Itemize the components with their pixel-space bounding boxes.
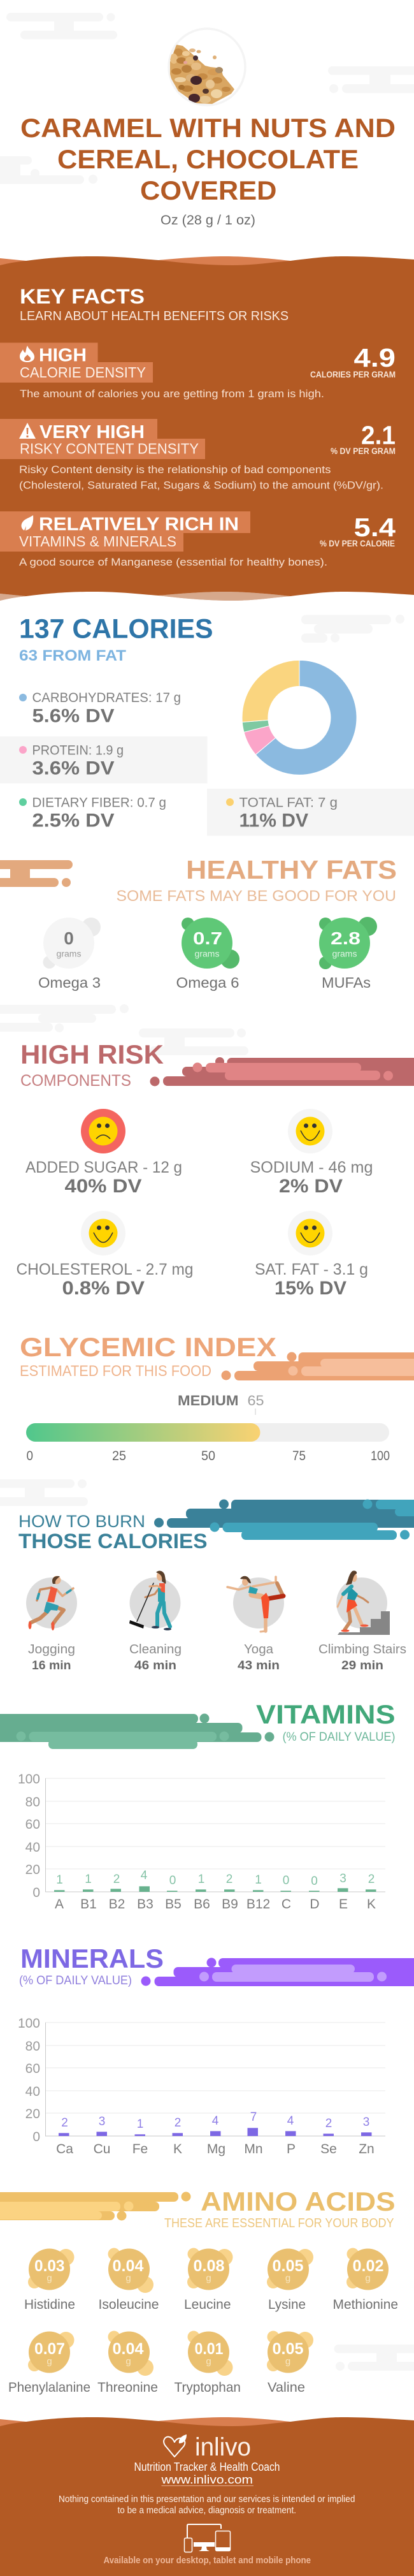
fact: calorie density: 4.9	[354, 343, 396, 372]
legend: carbohydrates: 5.6% DV	[32, 705, 115, 727]
fact: calorie density: CALORIE DENSITY	[20, 364, 146, 381]
burn heading: HOW TO BURN	[18, 1512, 145, 1531]
amino: leucine: g	[206, 2272, 211, 2284]
background cloud: title left	[0, 156, 97, 184]
amino: histidine: Histidine	[24, 2297, 75, 2312]
bar chart: vitamins: 1	[198, 1873, 204, 1886]
amino acids heading: THESE ARE ESSENTIAL FOR YOUR BODY	[164, 2216, 394, 2230]
legend: dietary fiber: DIETARY FIBER: 0.7 g	[32, 796, 166, 810]
stat: omega 3	[38, 918, 101, 991]
activity: yoga	[227, 1576, 284, 1672]
bar chart: minerals: Mg	[207, 2142, 225, 2156]
minerals heading	[19, 1943, 164, 1987]
amino: phenylalanine: Phenylalanine	[8, 2380, 90, 2395]
bar chart: minerals: 80	[25, 2039, 40, 2054]
glycemic heading	[20, 1332, 276, 1380]
background cloud: high risk	[139, 1028, 248, 1055]
decoration: vitamins bars	[0, 1714, 274, 1749]
bar chart: minerals: 2	[61, 2116, 68, 2130]
icon: warning triangle	[19, 423, 36, 439]
gauge bar	[26, 1423, 389, 1442]
logo: inlivo	[164, 2433, 251, 2461]
stat: omega 3: Omega 3	[38, 974, 101, 991]
activity: cleaning: Cleaning	[129, 1643, 182, 1657]
gauge label	[178, 1393, 264, 1415]
activity: jogging: 16 min	[32, 1659, 71, 1672]
fact: risky content density: RISKY CONTENT DENSITY	[20, 440, 199, 457]
bar chart: minerals: Se	[320, 2142, 337, 2156]
icon: sad face	[81, 1109, 125, 1153]
legend: protein	[0, 736, 208, 784]
amino: isoleucine	[98, 2248, 159, 2312]
bar chart: vitamins: B12	[246, 1897, 270, 1912]
key facts heading: KEY FACTS	[20, 285, 145, 308]
amino: lysine: 0.05	[273, 2257, 304, 2275]
healthy fats heading: SOME FATS MAY BE GOOD FOR YOU	[116, 888, 396, 905]
bar chart: vitamins: B3	[137, 1897, 153, 1912]
panel: minerals	[18, 1943, 414, 2156]
item: sodium: 2% DV	[279, 1176, 343, 1197]
logo: inlivo: inlivo	[195, 2433, 251, 2461]
bar chart: vitamins: 4	[141, 1869, 148, 1882]
activity: climbing stairs: 29 min	[341, 1659, 383, 1672]
title: COVERED	[140, 175, 276, 205]
fact: risky content density: Risky Content density is the relationship of bad components	[19, 464, 331, 476]
bar chart: vitamins: A	[55, 1897, 64, 1912]
panel: vitamins	[0, 1699, 396, 1912]
amino: lysine	[267, 2248, 313, 2312]
serving size: Oz (28 g / 1 oz)	[161, 213, 255, 228]
bar chart: minerals: K	[173, 2142, 182, 2156]
amino: threonine: 0.04	[112, 2340, 144, 2358]
fact: vitamins and minerals: A good source of Manganese (essential for healthy bones).	[19, 556, 327, 568]
item: cholesterol: CHOLESTEROL - 2.7 mg	[17, 1261, 194, 1278]
stat: omega 6: Omega 6	[176, 974, 239, 991]
disclaimer: to be a medical advice, diagnosis or treatment.	[117, 2505, 296, 2516]
donut chart	[242, 660, 357, 775]
decoration: healthy fats bars	[0, 860, 73, 887]
amino: valine: Valine	[268, 2380, 305, 2395]
item: added sugar: 40% DV	[65, 1176, 141, 1197]
activity: cleaning: 46 min	[134, 1659, 176, 1672]
stat: mufas	[319, 917, 377, 991]
amino acids heading	[164, 2186, 396, 2230]
bar chart: vitamins: 2	[368, 1873, 375, 1886]
calories heading	[19, 613, 213, 664]
amino: phenylalanine	[8, 2331, 90, 2395]
activity: cleaning	[129, 1571, 182, 1672]
fact: vitamins and minerals: 5.4	[354, 513, 396, 542]
stat: omega 6	[176, 918, 239, 991]
amino: methionine: g	[365, 2272, 371, 2284]
high risk heading: HIGH RISK	[20, 1039, 164, 1069]
decoration: minerals bars	[141, 1958, 414, 1986]
icon: runner	[26, 1576, 77, 1630]
bar chart: vitamins: 1	[56, 1873, 63, 1887]
bar chart: minerals: Cu	[94, 2142, 110, 2156]
title: CEREAL, CHOCOLATE	[57, 144, 359, 174]
item: saturated fat: 15% DV	[275, 1278, 346, 1299]
bar chart: vitamins: 100	[18, 1772, 40, 1787]
bar chart: minerals: 4	[287, 2114, 294, 2128]
bar chart: minerals	[18, 2016, 385, 2156]
calories heading: 63 FROM FAT	[19, 647, 126, 664]
background cloud: burn	[0, 1479, 88, 1506]
panel: glycemic index	[20, 1332, 414, 1463]
background cloud: top left	[6, 13, 117, 40]
background cloud: amino right	[334, 2345, 414, 2371]
minerals heading: MINERALS	[20, 1943, 164, 1973]
bar chart: vitamins: B2	[109, 1897, 125, 1912]
panel: key facts	[0, 256, 414, 603]
icon: happy face	[288, 1211, 332, 1255]
decoration: glycemic bars	[222, 1352, 414, 1380]
bar chart: minerals: Zn	[359, 2142, 375, 2156]
icon: leaf	[22, 515, 33, 531]
item: sodium	[250, 1109, 373, 1197]
fact: risky content density: % DV PER GRAM	[331, 446, 396, 456]
fact: risky content density	[0, 419, 396, 491]
legend: dietary fiber: 2.5% DV	[32, 810, 115, 831]
panel: calories	[0, 613, 414, 836]
bar chart: vitamins: C	[282, 1897, 291, 1912]
bar chart: vitamins: 3	[339, 1872, 346, 1885]
bar chart: minerals: 40	[25, 2084, 40, 2099]
key facts heading	[20, 285, 289, 323]
amino: isoleucine: 0.04	[112, 2257, 144, 2275]
availability note: Available on your desktop, tablet and mobile phone	[103, 2555, 311, 2566]
legend: carbohydrates	[19, 691, 181, 727]
background cloud: calories	[301, 615, 404, 643]
bar chart: vitamins: D	[310, 1897, 320, 1912]
amino: histidine	[24, 2248, 75, 2312]
activity: yoga: 43 min	[238, 1659, 280, 1672]
bar chart: vitamins: 0	[311, 1875, 318, 1888]
bar chart: minerals: 0	[32, 2130, 40, 2144]
amino: tryptophan: g	[206, 2356, 211, 2367]
bar chart: minerals: 100	[18, 2016, 40, 2031]
bar chart: vitamins: 20	[25, 1862, 40, 1877]
background cloud: top right	[328, 66, 414, 93]
stat: mufas: 2.8	[331, 928, 360, 948]
stat: omega 3: grams	[57, 949, 81, 959]
legend: total fat: TOTAL FAT: 7 g	[239, 796, 338, 810]
bar chart: minerals: 1	[137, 2118, 143, 2131]
amino: methionine	[332, 2248, 398, 2312]
bar chart: vitamins: 60	[25, 1817, 40, 1832]
amino: lysine: Lysine	[268, 2297, 306, 2312]
amino: tryptophan: Tryptophan	[175, 2380, 241, 2395]
legend: carbohydrates: CARBOHYDRATES: 17 g	[32, 691, 181, 705]
amino: valine	[267, 2331, 313, 2395]
bar chart: minerals: Fe	[132, 2142, 148, 2156]
icon: happy face	[288, 1109, 332, 1153]
fact: calorie density: The amount of calories you are getting from 1 gram is high.	[20, 388, 324, 400]
gauge scale: 100	[371, 1449, 390, 1463]
amino: leucine: Leucine	[184, 2297, 231, 2312]
stat: mufas: MUFAs	[322, 974, 371, 991]
gauge scale	[27, 1449, 390, 1463]
activity: climbing stairs	[318, 1570, 406, 1672]
glycemic heading: ESTIMATED FOR THIS FOOD	[20, 1363, 211, 1380]
amino: phenylalanine: 0.07	[34, 2340, 65, 2358]
bar chart: vitamins	[18, 1772, 385, 1912]
amino: lysine: g	[285, 2272, 290, 2284]
activity: yoga: Yoga	[244, 1643, 274, 1657]
footer wave	[0, 2417, 414, 2576]
bar chart: vitamins: 80	[25, 1795, 40, 1810]
bar chart: vitamins: 1	[255, 1873, 262, 1887]
vitamins heading: (% OF DAILY VALUE)	[283, 1731, 395, 1744]
tagline: Nutrition Tracker & Health Coach	[134, 2461, 280, 2473]
bar chart: vitamins: 40	[25, 1840, 40, 1855]
activity: jogging: Jogging	[28, 1643, 75, 1657]
fact: vitamins and minerals: RELATIVELY RICH IN	[39, 514, 239, 534]
food photo in circle	[169, 29, 245, 105]
bar chart: minerals: 3	[99, 2115, 105, 2128]
amino: methionine: Methionine	[332, 2297, 398, 2312]
bar chart: vitamins: 1	[85, 1873, 92, 1886]
title: CARAMEL WITH NUTS AND	[20, 113, 396, 143]
disclaimer	[59, 2494, 355, 2516]
bar chart: vitamins: B6	[194, 1897, 210, 1912]
vitamins heading	[256, 1699, 396, 1744]
disclaimer: Nothing contained in this presentation and our services is intended or implied	[59, 2494, 355, 2505]
amino: isoleucine: g	[125, 2272, 131, 2284]
bar chart: minerals: P	[287, 2142, 296, 2156]
bar chart: vitamins: 0	[32, 1885, 40, 1900]
fact: risky content density: (Cholesterol, Saturated Fat, Sugars & Sodium) to the amount (%DV/gr).	[19, 479, 383, 491]
amino: histidine: 0.03	[34, 2257, 65, 2275]
decoration: amino bars	[0, 2192, 191, 2220]
bar chart: vitamins: 2	[226, 1873, 232, 1886]
fact: risky content density: 2.1	[361, 421, 396, 450]
healthy fats heading	[116, 855, 397, 905]
activity: climbing stairs: Climbing Stairs	[318, 1643, 406, 1657]
vitamins heading: VITAMINS	[256, 1699, 396, 1729]
amino: leucine: 0.08	[194, 2257, 225, 2275]
bar chart: minerals: Ca	[56, 2142, 73, 2156]
legend: protein: PROTEIN: 1.9 g	[32, 743, 124, 757]
bar chart: vitamins: B9	[222, 1897, 238, 1912]
bar chart: minerals: 20	[25, 2107, 40, 2121]
amino: threonine	[97, 2331, 158, 2395]
fact: vitamins and minerals	[0, 511, 396, 568]
bar chart: minerals: 60	[25, 2061, 40, 2076]
bar chart: vitamins: E	[339, 1897, 348, 1912]
bar chart: vitamins: 2	[113, 1873, 120, 1886]
item: saturated fat: SAT. FAT - 3.1 g	[255, 1261, 368, 1278]
minerals heading: (% OF DAILY VALUE)	[19, 1974, 132, 1987]
gauge scale: 75	[292, 1449, 306, 1463]
high risk heading: COMPONENTS	[20, 1072, 131, 1090]
item: added sugar: ADDED SUGAR - 12 g	[25, 1159, 182, 1176]
item: added sugar	[25, 1109, 182, 1197]
fact: calorie density: HIGH	[39, 346, 87, 366]
bar chart: minerals: 3	[363, 2116, 369, 2129]
panel: healthy fats	[0, 855, 397, 991]
healthy fats heading: HEALTHY FATS	[186, 855, 397, 884]
bar chart: minerals: 2	[175, 2116, 181, 2130]
bar chart: vitamins: B1	[80, 1897, 97, 1912]
stat: omega 3: 0	[64, 928, 74, 948]
item: sodium: SODIUM - 46 mg	[250, 1159, 373, 1176]
key facts heading: LEARN ABOUT HEALTH BENEFITS OR RISKS	[20, 309, 289, 323]
bar chart: minerals: 4	[212, 2114, 219, 2128]
bar chart: vitamins: 0	[283, 1874, 289, 1887]
calories heading: 137 CALORIES	[19, 613, 213, 644]
stat: mufas: grams	[332, 949, 357, 959]
activity: jogging	[26, 1576, 77, 1672]
background cloud: fats bottom	[0, 1004, 129, 1032]
amino: threonine: g	[125, 2356, 131, 2367]
gauge scale: 50	[201, 1449, 215, 1463]
legend: protein: 3.6% DV	[32, 757, 115, 779]
high risk heading	[20, 1039, 164, 1090]
top wave	[0, 256, 414, 599]
amino: tryptophan	[175, 2331, 241, 2395]
item: cholesterol: 0.8% DV	[62, 1278, 145, 1299]
gauge scale: 0	[27, 1449, 33, 1463]
bar chart: minerals: 2	[325, 2117, 332, 2130]
panel: high risk	[17, 1039, 414, 1299]
amino: isoleucine: Isoleucine	[98, 2297, 159, 2312]
panel: amino acids	[0, 2186, 398, 2395]
icon: yoga pose	[227, 1576, 284, 1632]
panel: footer	[0, 2417, 414, 2576]
burn heading	[18, 1512, 208, 1553]
glycemic heading: GLYCEMIC INDEX	[20, 1332, 276, 1362]
bar chart: vitamins: 0	[169, 1874, 176, 1887]
icon: person sweeping	[129, 1571, 181, 1630]
amino: leucine	[184, 2248, 233, 2312]
bar chart: vitamins: K	[367, 1897, 376, 1912]
bar chart: minerals: Mn	[244, 2142, 263, 2156]
decoration: high risk bars	[150, 1057, 414, 1087]
tan wave accent	[0, 592, 290, 601]
gauge label: 65	[247, 1393, 264, 1409]
burn heading: THOSE CALORIES	[18, 1530, 208, 1553]
legend: total fat	[207, 789, 414, 836]
stat: omega 6: grams	[195, 949, 219, 959]
bar chart: vitamins: B5	[165, 1897, 182, 1912]
icon: happy face	[81, 1211, 125, 1255]
icon: devices	[185, 2524, 231, 2552]
amino: phenylalanine: g	[46, 2356, 52, 2367]
item: saturated fat	[255, 1211, 368, 1299]
amino acids heading: AMINO ACIDS	[201, 2186, 396, 2216]
fact: calorie density	[0, 343, 396, 400]
gauge label: MEDIUM	[178, 1393, 238, 1409]
amino: valine: 0.05	[273, 2340, 304, 2358]
legend: dietary fiber	[19, 796, 166, 831]
title	[20, 113, 396, 205]
icon: person climbing stairs	[336, 1570, 390, 1635]
bar chart: minerals: 7	[250, 2111, 257, 2124]
gauge scale: 25	[112, 1449, 126, 1463]
panel: how to burn	[18, 1500, 414, 1672]
legend: total fat: 11% DV	[239, 810, 308, 831]
fact: vitamins and minerals: % DV PER CALORIE	[320, 539, 395, 548]
amino: methionine: 0.02	[353, 2257, 383, 2275]
white wave under key facts	[0, 592, 414, 612]
website link: www.inlivo.com	[161, 2473, 253, 2486]
fact: risky content density: VERY HIGH	[39, 422, 145, 443]
amino: threonine: Threonine	[97, 2380, 158, 2395]
amino: histidine: g	[46, 2272, 52, 2284]
item: cholesterol	[17, 1211, 194, 1299]
icon: flame	[20, 346, 34, 362]
bottom wave	[0, 592, 414, 603]
decoration: burn bars	[154, 1500, 414, 1540]
amino: valine: g	[285, 2356, 290, 2367]
fact: calorie density: CALORIES PER GRAM	[310, 370, 396, 379]
fact: vitamins and minerals: VITAMINS & MINERALS	[19, 533, 176, 550]
stat: omega 6: 0.7	[193, 928, 222, 948]
amino: tryptophan: 0.01	[195, 2340, 224, 2358]
